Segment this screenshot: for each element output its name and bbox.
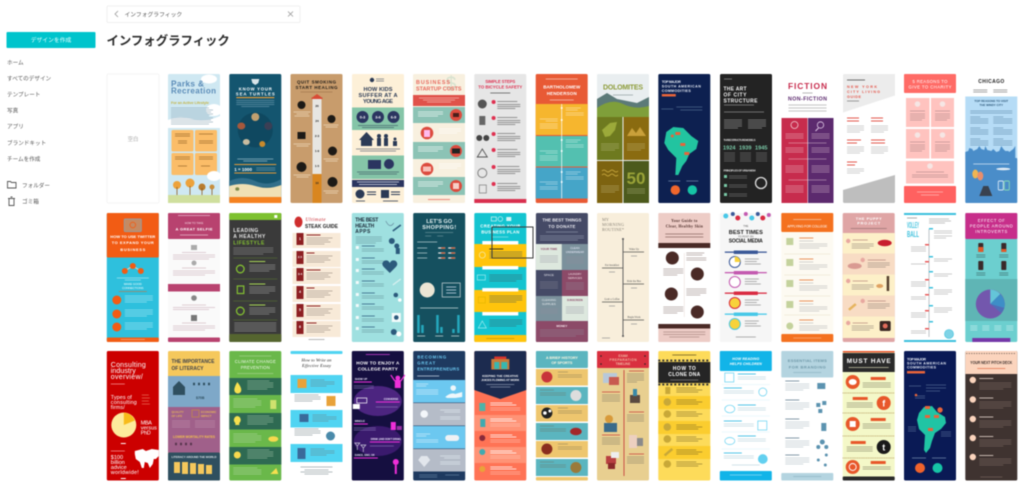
card: the puppy project: PROJECT [857, 222, 881, 226]
card: my morning routine: ROUTINE* [602, 227, 624, 232]
card: dolomites: 50 [627, 169, 645, 188]
card: clear healthy skin: Clear, Healthy Skin [666, 224, 703, 228]
card: let's go shopping: SHOPPING! [422, 225, 456, 231]
card: best things to donate [536, 213, 588, 342]
card: quit smoking: QUIT SMOKING [297, 80, 337, 84]
card: brief history of sports [536, 351, 588, 480]
card: a great selfie: HOW TO TAKE [185, 221, 203, 225]
card: how to enjoy a college party: HOW TO ENJOY A [356, 360, 400, 366]
card: best things to donate: UNDERWEAR [566, 250, 584, 254]
card: best health apps: THE BEST [355, 218, 378, 224]
card: how to use twitter [107, 213, 159, 342]
card: volleyball: VOLLEY [907, 221, 919, 230]
card: importance of literacy: LOWER MORTALITY RATES [173, 435, 215, 439]
card: best things to donate: SPACE [544, 273, 554, 277]
card: how to write an effective essay [290, 351, 342, 480]
sidebar menu: ブランドキット [7, 139, 46, 147]
card: art of city structure: STRUCTURE [724, 98, 758, 104]
card: chicago: TOP REASONS TO VISIT [974, 99, 1008, 103]
card: how reading helps children: HOW READING [732, 357, 760, 361]
card: let's go shopping: LET'S GO [426, 219, 453, 225]
card: consulting industry overview: worldwide! [110, 470, 139, 476]
card: steak guide: 5 [299, 308, 301, 312]
card: effect of people around introverts: EFFECT OF [978, 218, 1005, 223]
card: climate change prevention [229, 351, 281, 480]
card: how to clone dna: HOW TO [673, 366, 696, 372]
card: effect of people around introverts: INTROVERTS [975, 229, 1008, 234]
card: effect of people around introverts [965, 213, 1017, 342]
card: reasons to give to charity [904, 74, 956, 203]
card: my morning routine [597, 213, 649, 342]
card: how kids suffer: HOW KIDS [364, 87, 393, 93]
card: importance of literacy: IMPACT [201, 414, 212, 418]
card: exam preparation timeline: EXAM [618, 354, 628, 358]
card: how to use twitter: MAKE GOOD [124, 282, 142, 286]
card: let's go shopping [413, 213, 465, 342]
card: climate change prevention: CLIMATE CHANGE [235, 359, 276, 364]
card: how to use twitter: CONNECTIONS [122, 286, 144, 290]
card: clear healthy skin [658, 213, 710, 342]
card: art of city structure: 1945 [755, 146, 767, 152]
card: top major south american commodities [904, 351, 956, 480]
card: how to enjoy a college party: DANCE, SING, OR [355, 454, 375, 457]
selection rectangle [492, 227, 533, 258]
card: reasons to give to charity: 5 REASONS TO [912, 79, 948, 84]
card: my morning routine: Begin Work [628, 316, 641, 319]
card: quit smoking [290, 74, 342, 203]
card: how to enjoy a college party: DRINK (AND DON'T DRINK) [371, 438, 401, 441]
card: best things to donate: CLEANING [542, 298, 556, 302]
card: best things to donate: LAUNDRY [568, 272, 582, 276]
card: best times to post on social media: SOCIAL MEDIA [729, 238, 763, 244]
card: best things to donate: SUPPLIES [542, 302, 556, 306]
map of South America [664, 127, 698, 175]
card: essential items for branding [781, 351, 833, 480]
card: new york city living guide: CITY LIVING [847, 90, 880, 94]
card: the puppy project [843, 213, 895, 342]
card: how kids suffer [352, 74, 404, 203]
card: how to enjoy a college party: MINGLE [355, 419, 365, 423]
card: how to enjoy a college party: CONVERSE [384, 397, 399, 401]
card: how to use twitter: HOW TO USE TWITTER [110, 234, 155, 239]
card: becoming great entrepreneurs: BECOMING [417, 355, 447, 360]
card: brief history of sports: OF SPORTS [551, 361, 573, 365]
card: art of city structure: 1924 [723, 146, 736, 152]
card: must have social media tools: f [882, 398, 886, 408]
page title: インフォグラフィック [106, 33, 230, 48]
card: clear healthy skin: Your Guide to [671, 219, 697, 223]
card: dolomites [597, 74, 649, 203]
card: parks and recreation: For an Active Lifestyle [171, 101, 209, 105]
card: consulting industry overview: industry [111, 368, 136, 375]
card: volleyball: BALL [907, 230, 919, 239]
card: consulting industry overview: overview/ [111, 374, 143, 381]
card: business startup costs: STARTUP COSTS [416, 86, 462, 92]
card: how to use twitter: BUSINESS [120, 247, 146, 252]
card: must have social media tools [843, 351, 895, 480]
card: consulting industry overview: consulting [111, 400, 137, 406]
sidebar menu: すべてのデザイン [7, 74, 52, 82]
card: dolomites: DOLOMITES [603, 84, 643, 92]
card: south american commodities: COMMODITIES [662, 89, 691, 93]
card: top major south american commodities: TOP MAJOR [907, 358, 926, 362]
card: how kids suffer: 3-6 [375, 116, 381, 120]
card: how reading helps children: HELPS CHILDREN [730, 362, 762, 366]
card: fiction vs non-fiction: NON-FICTION [788, 96, 827, 102]
card: art of city structure: THE ART [724, 86, 746, 92]
card: quit smoking: 10 [315, 181, 319, 185]
sidebar menu: テンプレート [7, 92, 40, 98]
card: your next pitch deck: YOUR NEXT PITCH DECK [970, 360, 1013, 365]
card: must have social media tools: MUST HAVE [847, 358, 891, 365]
card: my morning routine: Ride the Bus [627, 280, 641, 283]
sidebar menu: 写真 [7, 106, 19, 114]
card: your next pitch deck [965, 351, 1017, 480]
card: bartholomew henderson: BARTHOLOMEW [543, 84, 581, 90]
card: steak guide: 3-4 [298, 272, 302, 276]
card: quit smoking: 1-9 [315, 149, 319, 153]
card: becoming great entrepreneurs: ENTREPRENEURS [417, 367, 459, 372]
card: chicago [965, 74, 1017, 203]
card: the puppy project: THE PUPPY [856, 217, 882, 221]
card: how to enjoy a college party [352, 351, 405, 480]
card: my morning routine: Wake Up [629, 248, 640, 251]
card: new york city living guide: GUIDE [847, 95, 862, 99]
sidebar menu: フォルダー [22, 182, 50, 190]
card: south american commodities [658, 74, 710, 203]
card: business startup costs [413, 74, 465, 203]
card: importance of literacy: OF LITERACY [172, 366, 204, 372]
card: best health apps: APPS [355, 229, 371, 235]
card: creating your business plan: CREATING YOUR [480, 224, 521, 228]
card: business startup costs: $ [446, 74, 457, 95]
card: importance of literacy: ECONOMIC [201, 410, 216, 414]
card: keeping the creative juices flowing: JUICES FLOWING AT WORK [481, 378, 520, 382]
card: best things to donate: SERVICES [568, 276, 582, 280]
search bar: インフォグラフィック [124, 10, 182, 18]
card: consulting industry overview: versus [141, 426, 157, 432]
card: best health apps: HEALTH [355, 224, 375, 230]
blank template card [107, 74, 159, 203]
card: best times to post on social media [720, 212, 772, 342]
card: importance of literacy: OF LIFE [172, 414, 182, 418]
card: best times to post on social media: BEST TIMES [729, 230, 763, 236]
card: quit smoking: 24 [315, 119, 319, 123]
map of South America [917, 406, 946, 453]
card: creating your business plan [474, 213, 526, 342]
card: bicycle safety [474, 74, 526, 203]
card: how to write an effective essay: How to Write an [300, 358, 332, 362]
card: keeping the creative juices flowing [474, 351, 526, 480]
card: steak guide [290, 213, 342, 342]
card: leading a healthy lifestyle: LIFESTYLE [233, 240, 265, 246]
card: best times to post on social media: TO POST ON [738, 236, 754, 238]
card: consulting industry overview: $100 [111, 455, 123, 461]
card: quit smoking: 20 [315, 104, 319, 108]
card: how to enjoy a college party: SHOW UP [355, 377, 367, 381]
card: steak guide: 2.5 [298, 255, 302, 259]
card: bicycle safety: SIMPLE STEPS [485, 79, 515, 84]
card: art of city structure: THREE STRUCTURE MODELS [724, 138, 756, 142]
card: how kids suffer: YOUNG AGE [363, 99, 393, 105]
card: becoming great entrepreneurs [413, 351, 465, 480]
card: sea turtles: SEA TURTLES [236, 92, 275, 96]
sidebar menu: アプリ [7, 124, 24, 130]
card: sea turtles: 1 = 1000 [234, 167, 252, 172]
card: leading a healthy lifestyle [229, 213, 281, 342]
card: sea turtles [229, 74, 281, 203]
card: south american commodities: TOP MAJOR [662, 80, 681, 84]
card: bartholomew henderson: HENDERSON [547, 91, 577, 96]
card: fiction vs non-fiction [782, 74, 834, 203]
card: how kids suffer: SUFFER AT A [358, 93, 398, 99]
card: consulting industry overview [107, 351, 159, 480]
card: importance of literacy: $70B [196, 396, 205, 400]
card: exam preparation timeline [597, 351, 649, 480]
card: applying for college: APPLYING FOR COLLEGE [787, 224, 828, 228]
card: leading a healthy lifestyle: A HEALTHY [233, 234, 266, 240]
card: best times to post on social media: THE [743, 225, 749, 228]
card: top major south american commodities: COMMODITIES [907, 366, 937, 370]
card: new york city living guide [843, 74, 895, 203]
card: south american commodities: SOUTH AMERICAN [662, 84, 701, 88]
card: parks and recreation [168, 74, 222, 203]
blank template card: 空白 [128, 135, 138, 143]
card: fiction vs non-fiction: FICTION [788, 81, 827, 91]
sidebar menu: ゴミ箱 [22, 198, 39, 206]
sidebar menu: ホーム [7, 60, 24, 66]
card: parks and recreation: Recreation [171, 86, 216, 96]
create design button [6, 32, 96, 48]
card: applying for college [781, 213, 833, 342]
card: parks and recreation: Parks & [171, 78, 204, 88]
card: keeping the creative juices flowing: KEEPING THE CREATIVE [482, 374, 518, 378]
card: best things to donate: YOUR TIME [541, 247, 557, 251]
card: top major south american commodities: SOUTH AMERICAN [907, 362, 946, 366]
card: consulting industry overview: Consulting [111, 362, 146, 369]
card: best things to donate: THE BEST THINGS [542, 218, 582, 222]
card: quit smoking: 2-3 [315, 134, 319, 138]
card: consulting industry overview: billion [111, 460, 125, 466]
card: my morning routine: Grab a Coffee [604, 298, 620, 301]
card: importance of literacy: LITERACY AROUND THE WORLD [172, 455, 216, 459]
card: quit smoking: 1-5 [315, 164, 319, 168]
card: how reading helps children [720, 351, 772, 480]
card: leading a healthy lifestyle: LEADING [233, 228, 258, 234]
card: consulting industry overview: PhD [141, 430, 151, 436]
sidebar menu [7, 60, 52, 206]
card: chicago: THE WINDY CITY [980, 103, 1003, 107]
card: becoming great entrepreneurs: GREAT [417, 361, 436, 366]
card: steak guide: 1 [299, 237, 301, 241]
card: new york city living guide: NEW YORK [847, 85, 877, 89]
card: brief history of sports: A BRIEF HISTORY [546, 356, 578, 360]
card: volleyball [904, 213, 956, 342]
card: my morning routine: Eat breakfast [605, 264, 619, 267]
card: importance of literacy: QUALITY [172, 410, 184, 414]
card: must have social media tools: t [882, 442, 885, 452]
card: essential items for branding: ESSENTIAL ITEMS [788, 358, 827, 363]
card: how to enjoy a college party: COLLEGE PARTY [358, 366, 398, 372]
card: best things to donate: CLEAN [570, 246, 580, 250]
card: best things to donate: SUNSCREEN [567, 299, 583, 302]
card: bicycle safety: TO BICYCLE SAFETY [478, 84, 522, 90]
card: consulting industry overview: Types of [111, 395, 132, 401]
card: exam preparation timeline: PREPARATION [610, 358, 637, 362]
card: art of city structure: OF CITY [724, 92, 747, 98]
create design button: デザインを作成 [31, 36, 71, 44]
card: art of city structure: PRINCIPLES OF URBANISM [724, 168, 756, 172]
card: best things to donate: MONEY [556, 324, 567, 328]
card: best health apps [352, 213, 404, 342]
card: steak guide: 4 [299, 290, 301, 294]
card: essential items for branding: FOR BRANDING [789, 364, 826, 370]
card: best things to donate: TO DONATE [548, 224, 576, 229]
card: how kids suffer: 6-9 [391, 116, 396, 120]
card: chicago: CHICAGO [978, 79, 1004, 85]
card: business startup costs: BUSINESS [416, 80, 450, 86]
card: quit smoking: START HEALING [296, 85, 338, 90]
card: bartholomew henderson [536, 74, 588, 203]
card: a great selfie: A GREAT SELFIE [176, 226, 213, 232]
card: climate change prevention: PREVENTION [241, 365, 270, 370]
card: steak guide: 6 [299, 325, 301, 329]
card: consulting industry overview: firms/ [111, 405, 125, 411]
card: steak guide: Ultimate [306, 218, 326, 223]
card: how kids suffer: 0-3 [360, 116, 365, 120]
card: exam preparation timeline: TIMELINE [616, 362, 630, 366]
card: consulting industry overview: MBA [141, 420, 152, 426]
card: sea turtles: KNOW YOUR [239, 86, 273, 92]
sidebar menu: チームを作成 [7, 155, 41, 163]
card: reasons to give to charity: GIVE TO CHARITY [908, 84, 952, 90]
card: how to write an effective essay: Effective Essay [301, 363, 331, 368]
card: importance of literacy [168, 351, 220, 480]
card: consulting industry overview: advice [111, 465, 127, 471]
card: effect of people around introverts: PEOPLE AROUND [970, 224, 1013, 228]
card: steak guide: STEAK GUIDE [305, 224, 338, 230]
card: my morning routine: MY [602, 217, 609, 222]
search bar [107, 6, 300, 22]
card: my morning routine: MORNING [602, 222, 624, 227]
card: a great selfie [168, 213, 220, 342]
card: art of city structure: 1939 [739, 146, 751, 152]
card: creating your business plan: BUSINESS PLAN [481, 230, 519, 234]
card: art of city structure [720, 74, 772, 203]
card: how to use twitter: TO EXPAND YOUR [112, 240, 154, 245]
card: importance of literacy: THE IMPORTANCE [172, 359, 215, 365]
card: how to clone dna: CLONE DNA [668, 372, 701, 378]
card: how to clone dna [658, 351, 710, 480]
